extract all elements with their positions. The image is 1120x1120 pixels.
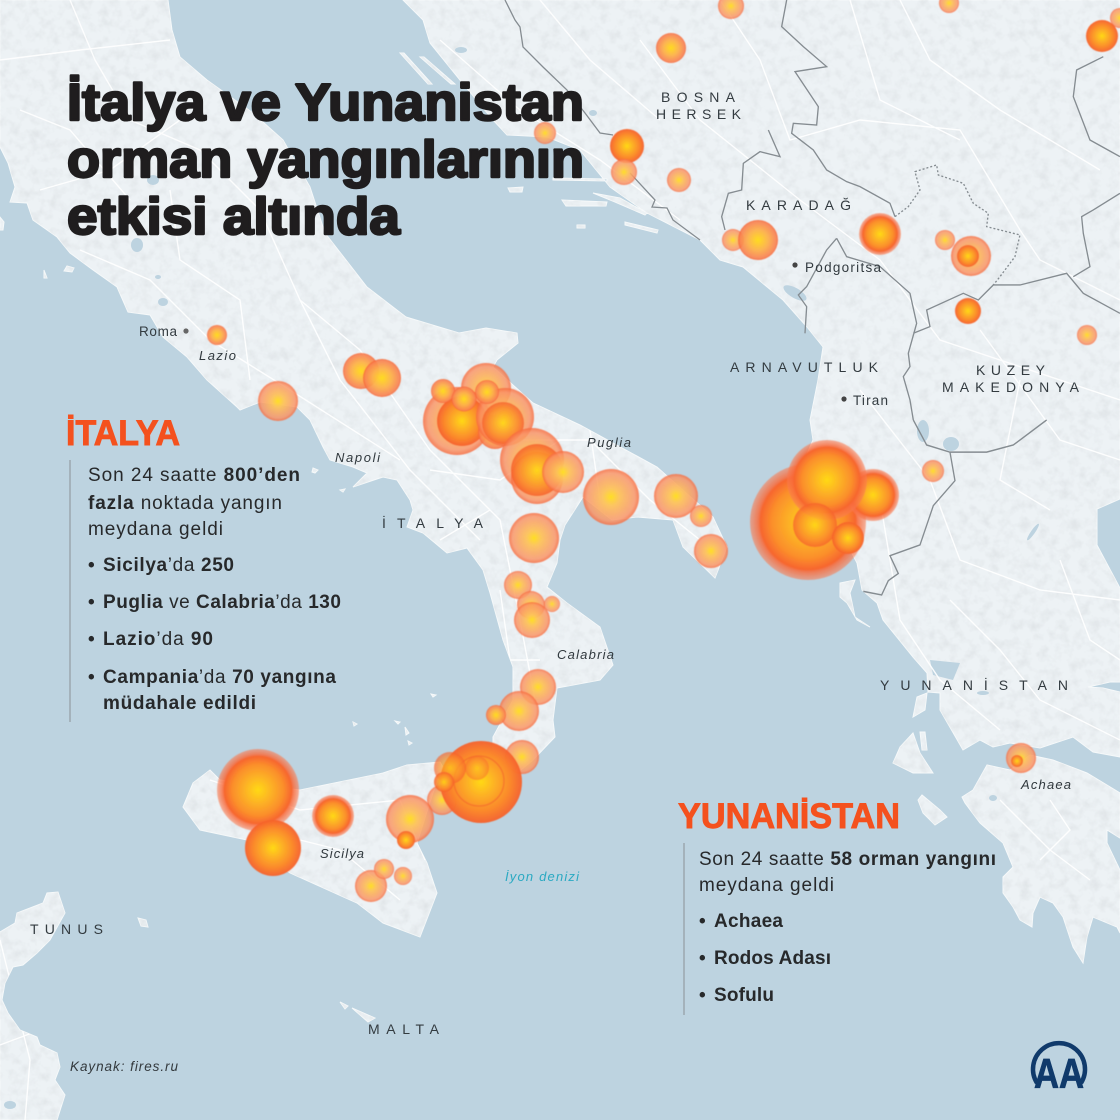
heading: Greece: YUNANİSTAN	[678, 797, 900, 836]
title: orman yangınlarının	[67, 131, 584, 189]
text block: Italy facts: Sicilya’da 250	[103, 555, 234, 576]
text block: Greece facts: •	[699, 948, 706, 969]
text block: Italy facts: Lazio’da 90	[103, 629, 213, 650]
map labels: regions and sea: İyon denizi	[505, 869, 580, 884]
map labels: regions and sea: Sicilya	[320, 846, 364, 861]
panel: Greece	[678, 797, 996, 1015]
text block: Greece facts: Sofulu	[714, 985, 774, 1006]
title: İtalya ve Yunanistan	[67, 74, 584, 132]
map labels: regions and sea: Lazio	[199, 348, 236, 363]
map labels: countries and cities: KUZEY	[976, 362, 1046, 378]
text block: Italy facts: •	[88, 592, 95, 613]
text block: Italy facts: Puglia ve Calabria’da 130	[103, 592, 341, 613]
text block: Greece facts: Rodos Adası	[714, 948, 831, 969]
text block: Greece facts: •	[699, 911, 706, 932]
text block: Italy facts: •	[88, 667, 95, 688]
map labels: countries and cities: BOSNA	[661, 89, 736, 105]
map labels: regions and sea	[199, 348, 1071, 884]
map labels: countries and cities: ARNAVUTLUK	[730, 359, 879, 375]
fire circles: Sicily	[217, 749, 434, 902]
map labels: regions and sea: Achaea	[1020, 777, 1071, 792]
title	[67, 74, 584, 246]
text block: Greece facts: meydana geldi	[699, 875, 834, 896]
source note: Kaynak: fires.ru	[70, 1059, 178, 1074]
heading: Italy: İTALYA	[66, 414, 180, 453]
text block: Italy facts: fazla noktada yangın	[88, 493, 282, 514]
text block: Italy facts	[88, 465, 341, 714]
map labels: countries and cities	[30, 89, 1080, 1037]
text block: Italy facts: müdahale edildi	[103, 693, 256, 714]
fire circles: Italy mainland	[207, 325, 728, 568]
text block: Italy facts: Campania’da 70 yangına	[103, 667, 336, 688]
fire circles: Calabria	[427, 571, 560, 823]
text block: Greece facts: Son 24 saatte 58 orman yangını	[699, 849, 996, 870]
map labels: countries and cities: MAKEDONYA	[942, 379, 1080, 395]
panel: Italy	[66, 414, 341, 722]
map labels: regions and sea: Napoli	[335, 450, 381, 465]
map: national borders	[505, 0, 1120, 595]
text block: Italy facts: Son 24 saatte 800’den	[88, 465, 300, 486]
fire circles: Balkans	[534, 0, 1120, 345]
text block: Italy facts: meydana geldi	[88, 519, 223, 540]
map labels: countries and cities: İTALYA	[382, 514, 484, 531]
map labels: countries and cities: Tiran	[853, 393, 888, 408]
text block: Greece facts	[699, 849, 996, 1006]
map labels: regions and sea: Puglia	[587, 435, 631, 450]
text block: Italy facts: •	[88, 629, 95, 650]
map labels: countries and cities: KARADAĞ	[746, 197, 851, 213]
text block: Greece facts: Achaea	[714, 911, 783, 932]
map labels: countries and cities: Podgoritsa	[805, 260, 881, 275]
map labels: countries and cities: MALTA	[368, 1021, 440, 1037]
map labels: countries and cities: YUNANİSTAN	[880, 676, 1068, 693]
map labels: countries and cities: TUNUS	[30, 921, 103, 937]
map labels: countries and cities: Roma	[139, 324, 177, 339]
title: etkisi altında	[67, 188, 401, 246]
text block: Italy facts: •	[88, 555, 95, 576]
text block: Greece facts: •	[699, 985, 706, 1006]
map labels: regions and sea: Calabria	[557, 647, 614, 662]
fire circles: Albania and Greece cluster	[750, 440, 1036, 773]
icon: AA logo: AA	[1034, 1050, 1084, 1097]
map labels: countries and cities: HERSEK	[656, 106, 742, 122]
